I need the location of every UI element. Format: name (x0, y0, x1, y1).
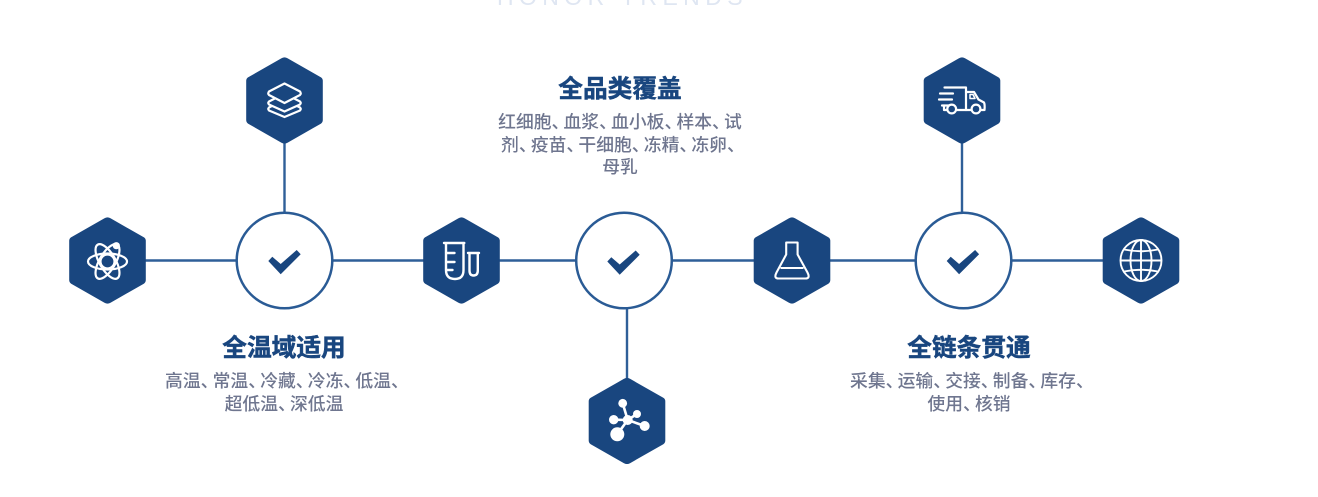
text block: full category coverage (498, 76, 745, 177)
text block: full chain: 采集、运输、交接、制备、库存、 (850, 371, 1094, 391)
connector lines (140, 135, 1110, 385)
icon: molecule hexagon (589, 378, 665, 464)
text block: full category coverage: 全品类覆盖 (558, 76, 682, 103)
white mask: clips bottom hexagon tip (580, 464, 674, 476)
text block: full category coverage: 红细胞、血浆、血小板、样本、试 (498, 112, 742, 132)
text block: full chain: 使用、核销 (927, 394, 1011, 414)
text block: full category coverage: 母乳 (602, 157, 638, 177)
text block: full chain (850, 334, 1094, 414)
icon: delivery truck hexagon (924, 57, 1000, 144)
icon: flask hexagon (754, 217, 830, 304)
icon: layers hexagon (246, 57, 323, 144)
icon: test tubes hexagon (423, 217, 500, 304)
text block: full temperature range: 全温域适用 (222, 335, 346, 362)
circle node 1 with check (237, 213, 332, 308)
icon: globe hexagon (1103, 217, 1179, 304)
text block: full chain: 全链条贯通 (907, 335, 1031, 362)
text block: full category coverage: 剂、疫苗、干细胞、冻精、冻卵、 (501, 135, 745, 155)
text block: full temperature range: 超低温、深低温 (225, 394, 343, 414)
text block: full temperature range: 高温、常温、冷藏、冷冻、低温、 (165, 371, 409, 391)
circle node 2 with check (576, 213, 672, 308)
text block: full temperature range (165, 334, 409, 414)
circle node 3 with check (916, 213, 1011, 308)
icon: atom hexagon (69, 217, 146, 304)
